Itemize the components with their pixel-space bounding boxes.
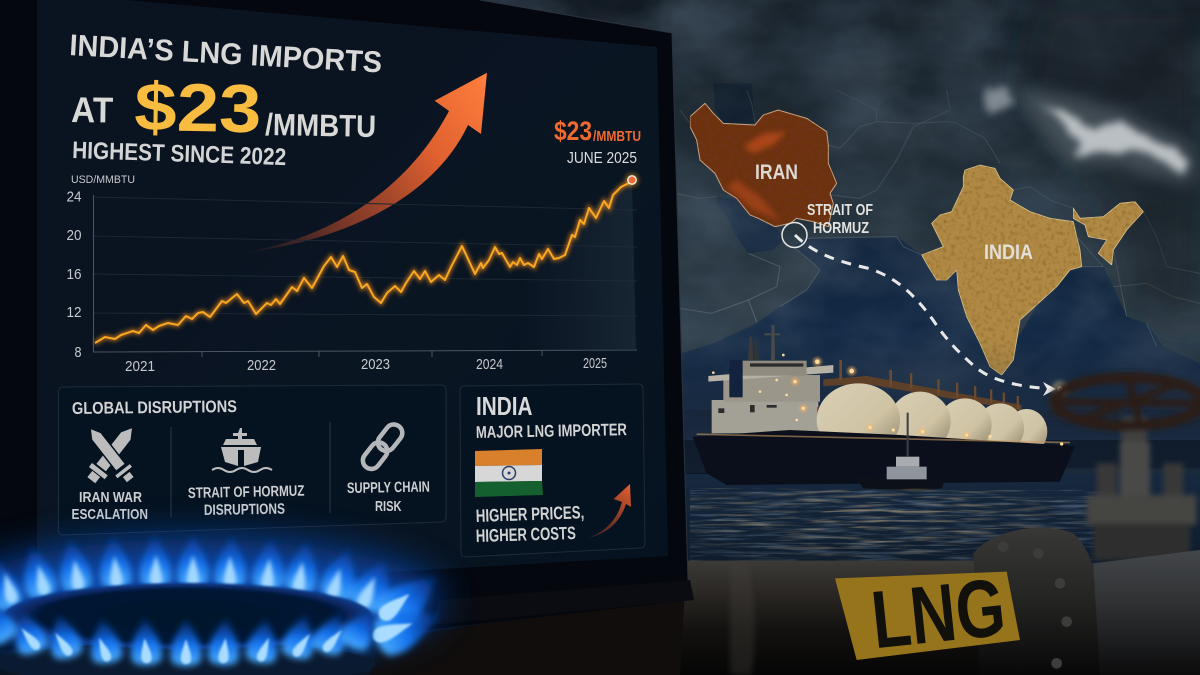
- callout: $23/MMBTU June 2025: [554, 116, 641, 167]
- label: Strait of Hormuz: [807, 202, 873, 237]
- icon: ship: [212, 428, 272, 472]
- water ripples: [690, 488, 1110, 570]
- sky behind ship: [684, 353, 1200, 474]
- flame cores, back row: [0, 555, 381, 610]
- icon: crossed missiles: [82, 422, 140, 486]
- screen: [37, 0, 668, 592]
- icon: Indian flag: [475, 449, 543, 497]
- text: higher prices, higher costs: HIGHER COSTS: [476, 523, 576, 546]
- y-axis unit: USD/MMBTU: [71, 174, 135, 186]
- x-axis labels: 2021: [125, 358, 155, 375]
- area under line: [520, 180, 636, 350]
- label: Strait of Hormuz: STRAIT OF: [807, 202, 873, 219]
- monitor bezel: [0, 0, 692, 650]
- x-axis labels: 2023: [361, 356, 390, 373]
- panel: India: [460, 384, 645, 557]
- label: Iran war escalation: IRAN WAR: [79, 489, 142, 506]
- headline: price: /MMBTU: [265, 107, 376, 144]
- LNG label band: [835, 562, 1020, 666]
- monitor stand base: [430, 580, 694, 625]
- label: Strait of Hormuz: HORMUZ: [813, 220, 869, 237]
- label: supply chain risk: RISK: [375, 498, 402, 515]
- headline: price: $23: [134, 69, 262, 147]
- label: Iran war escalation: [72, 489, 148, 523]
- flame glow: [0, 540, 440, 660]
- big rising arrow: [242, 73, 487, 253]
- x-axis labels: 2025: [583, 355, 607, 372]
- text: major LNG importer: MAJOR LNG IMPORTER: [476, 420, 627, 442]
- monitor: [0, 0, 694, 650]
- cloudy sky behind monitor top: [400, 0, 700, 120]
- valve and wheel: [1054, 378, 1200, 560]
- callout: $23/MMBTU June 2025: $23: [554, 116, 592, 146]
- panel heading: GLOBAL DISRUPTIONS: [72, 397, 237, 418]
- label: supply chain risk: [347, 479, 430, 515]
- subtitle: highest since 2022: HIGHEST SINCE 2022: [72, 137, 287, 171]
- back flames: [0, 533, 450, 660]
- y-axis labels: 16: [66, 266, 82, 283]
- headline: price: [71, 69, 376, 147]
- label: Iran: IRAN: [755, 161, 798, 184]
- LNG label band: LNG: [867, 562, 1009, 666]
- shipping route: Hormuz to India: [782, 222, 1068, 397]
- text: higher prices, higher costs: [475, 502, 585, 546]
- sea: Arabian Sea and Bay of Bengal: [660, 237, 1200, 410]
- LNG spheres: [816, 360, 1048, 444]
- distant shoreline: [1063, 468, 1200, 474]
- burner centre: [4, 583, 372, 649]
- deck lights: [697, 354, 1070, 446]
- label: India: INDIA: [984, 241, 1033, 264]
- ship hull: [693, 430, 1075, 485]
- gridlines and axes: [94, 195, 637, 357]
- x-axis labels: [125, 355, 607, 375]
- heading: India: INDIA: [476, 391, 533, 421]
- sea: Caspian: [713, 83, 755, 123]
- headline: India's LNG imports: INDIA’S LNG IMPORTS: [69, 29, 383, 79]
- x-axis labels: 2022: [247, 357, 276, 374]
- callout: $23/MMBTU June 2025: JUNE 2025: [567, 150, 637, 167]
- LNG tanker at sea: [660, 325, 1200, 571]
- label: Strait of Hormuz disruptions: DISRUPTIONS: [204, 501, 285, 519]
- text: higher prices, higher costs: HIGHER PRICES,: [475, 502, 585, 526]
- label: supply chain risk: SUPPLY CHAIN: [347, 479, 430, 497]
- gas burner flame: [0, 533, 450, 675]
- Iran: [690, 103, 837, 227]
- y-axis labels: 12: [66, 304, 82, 321]
- country borders: [660, 90, 1200, 347]
- storm clouds: [484, 0, 1200, 440]
- price line: [95, 180, 632, 343]
- water: [660, 474, 1200, 571]
- line chart: LNG price 2021-2025: [66, 173, 639, 375]
- callout: $23/MMBTU June 2025: /MMBTU: [593, 128, 641, 145]
- panel: global disruptions: [58, 385, 446, 535]
- ship superstructure: [708, 325, 846, 433]
- price line glow: [95, 180, 632, 343]
- label: Strait of Hormuz disruptions: [188, 483, 305, 519]
- front flames: [0, 596, 383, 666]
- map: Middle East and South Asia: [484, 0, 1200, 440]
- x-axis labels: 2024: [476, 356, 503, 373]
- India: [922, 165, 1143, 375]
- y-axis labels: 20: [66, 227, 82, 244]
- sea: Persian Gulf: [717, 197, 783, 253]
- icon: small rising arrow: [588, 484, 631, 538]
- LNG pipeline: [680, 528, 1200, 675]
- end marker: [625, 173, 639, 187]
- y-axis labels: 8: [74, 344, 82, 361]
- tugboat: [855, 413, 945, 491]
- ground: [370, 590, 1200, 675]
- burner base: [0, 642, 376, 675]
- flame cores, front row: [18, 625, 345, 664]
- label: Iran war escalation: ESCALATION: [72, 506, 148, 523]
- headline: price: AT: [71, 89, 113, 131]
- y-axis labels: [66, 188, 82, 361]
- label: Strait of Hormuz disruptions: STRAIT OF HORMUZ: [188, 483, 305, 502]
- icon: chain link: [359, 421, 406, 472]
- y-axis labels: 24: [66, 188, 82, 206]
